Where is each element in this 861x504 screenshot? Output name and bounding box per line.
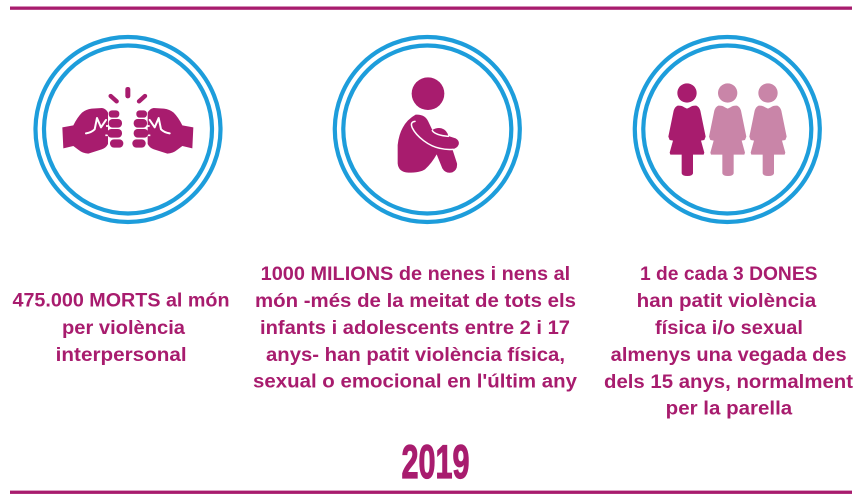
panel: deaths — [12, 37, 230, 366]
text: women — [604, 263, 854, 419]
text: deaths: per violència — [62, 317, 185, 339]
text: deaths: interpersonal — [56, 344, 187, 366]
text: women: almenys una vegada des — [611, 344, 847, 366]
top rule — [10, 6, 852, 10]
text: children — [253, 263, 577, 393]
icon: double ring — [335, 37, 520, 222]
bottom rule — [10, 491, 852, 494]
panel: children — [253, 37, 577, 393]
icon: three women, one highlighted — [668, 83, 787, 176]
text: women: 1 de cada 3 DONES — [640, 263, 818, 285]
text: women: física i/o sexual — [655, 317, 803, 339]
text: children: 1000 MILIONS de nenes i nens al — [261, 263, 570, 285]
icon: clashing fists — [62, 87, 193, 154]
text: children: sexual o emocional en l'últim any — [253, 371, 577, 393]
text: children: món -més de la meitat de tots els — [255, 290, 576, 312]
text: deaths — [12, 290, 230, 366]
year heading: 2019 — [402, 435, 470, 488]
icon: seated child — [398, 77, 459, 173]
text: women: han patit violència — [637, 290, 816, 312]
panel: women — [604, 37, 854, 419]
text: deaths: 475.000 MORTS al món — [12, 290, 230, 312]
text: women: per la parella — [666, 397, 792, 419]
icon: double ring — [36, 37, 220, 222]
text: children: infants i adolescents entre 2 i 17 — [260, 317, 570, 339]
text: children: anys- han patit violència física, — [266, 344, 565, 366]
text: women: dels 15 anys, normalment — [604, 371, 854, 393]
icon: double ring — [635, 37, 820, 222]
